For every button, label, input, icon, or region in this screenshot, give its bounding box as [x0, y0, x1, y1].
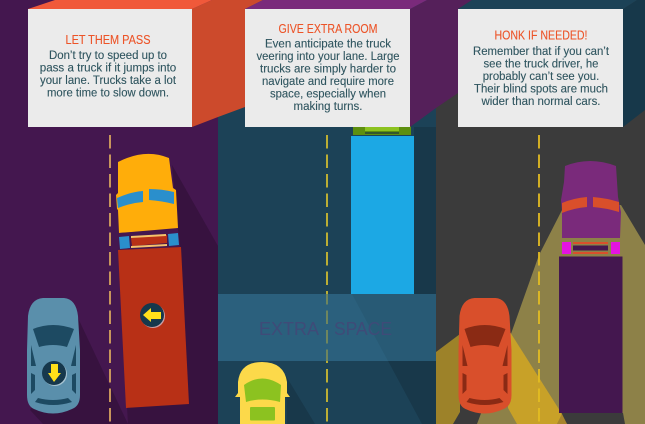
- panel: let them pass road: [0, 0, 218, 424]
- blind spot: car right: [508, 332, 562, 424]
- extrusion: purple: [245, 0, 472, 127]
- label: space: SPACE: [334, 318, 392, 339]
- panel: extra room road: [218, 0, 436, 424]
- lane dashes: [109, 135, 111, 424]
- body text: Their blind spots are much: [474, 82, 608, 96]
- extrusion: orange: [28, 0, 263, 127]
- extra space band: [218, 135, 436, 424]
- body text: more time to slow down.: [47, 86, 169, 100]
- truck: purple: [559, 161, 622, 413]
- body text: navigate and require more: [262, 74, 394, 88]
- lane dashes: [538, 135, 540, 424]
- shadow: blue car: [30, 318, 128, 424]
- body text: wider than normal cars.: [481, 94, 600, 108]
- body text: [256, 37, 400, 113]
- extrusion: blue: [458, 0, 645, 127]
- car: yellow: [235, 362, 290, 424]
- card: let them pass: [28, 9, 192, 127]
- blind spot: car left: [436, 334, 460, 424]
- card: honk if needed: [458, 9, 623, 127]
- body text: veering into your lane. Large: [256, 49, 400, 63]
- blue truck: [351, 125, 414, 294]
- panel: honk road: [436, 0, 645, 424]
- body text: pass a truck if it jumps into: [40, 61, 176, 75]
- shadow: blue truck: [352, 127, 436, 424]
- body text: see the truck driver, he: [484, 57, 599, 71]
- heading: LET THEM PASS: [66, 32, 151, 47]
- label: extra: EXTRA: [259, 318, 320, 339]
- body text: making turns.: [294, 99, 362, 113]
- body text: [473, 44, 610, 108]
- shadow: yellow car: [286, 376, 315, 424]
- blind spot: truck: [477, 205, 645, 424]
- blind spot overlap: [557, 414, 567, 424]
- card: give extra room: [245, 9, 410, 127]
- body text: Even anticipate the truck: [265, 37, 392, 51]
- car: red: [458, 298, 512, 414]
- car: blue: [27, 298, 80, 414]
- lane dashes: [326, 135, 328, 424]
- body text: trucks are simply harder to: [260, 62, 396, 76]
- heading: HONK IF NEEDED!: [494, 28, 588, 42]
- shadow: truck: [118, 165, 218, 424]
- body text: space, especially when: [270, 87, 386, 101]
- body text: Don’t try to speed up to: [49, 48, 167, 62]
- body text: Remember that if you can’t: [473, 44, 610, 58]
- body text: your lane. Trucks take a lot: [40, 73, 177, 87]
- body text: probably can’t see you.: [483, 69, 599, 83]
- truck: red and yellow: [116, 154, 189, 408]
- body text: [40, 48, 177, 100]
- heading: GIVE EXTRA ROOM: [278, 21, 378, 36]
